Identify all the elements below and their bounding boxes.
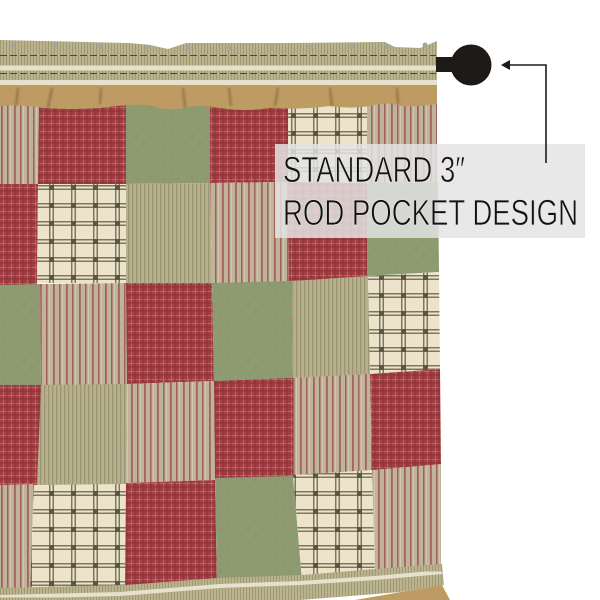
ruffle folds (16, 88, 398, 108)
top header band (0, 40, 437, 88)
ruffle (0, 85, 437, 110)
patch row 2 (0, 182, 439, 285)
patch row 4 (0, 369, 441, 487)
curtain rings (10, 42, 428, 50)
arrow pointing to rod (501, 60, 546, 163)
bottom hem band (0, 564, 444, 600)
lower ruffle (355, 585, 450, 600)
translucent callout panel (275, 144, 585, 238)
callout text (283, 149, 578, 233)
patch row 1 (0, 98, 437, 184)
patch row 3 (0, 272, 440, 385)
patch row 5 (0, 464, 441, 590)
callout text: STANDARD 3″ (283, 149, 465, 190)
curtain rod and finial (436, 44, 492, 86)
curtain (0, 40, 450, 600)
lace trim (0, 572, 442, 597)
